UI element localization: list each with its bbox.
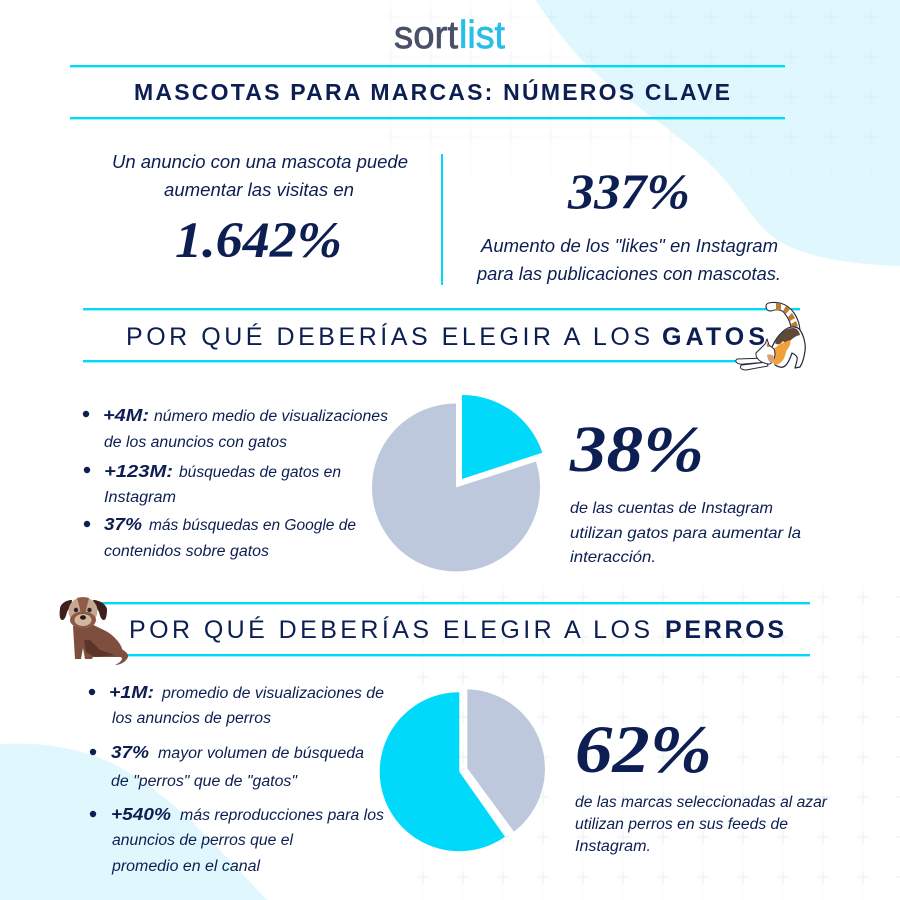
list item: 37% xyxy=(90,742,364,790)
text: aumento de likes xyxy=(476,236,781,284)
list item: +1M: +1M: xyxy=(109,682,154,702)
panel: perros list xyxy=(89,682,384,875)
text: cuentas de Instagram xyxy=(570,500,801,566)
text: marcas seleccionadas: de las marcas seleccionadas al azar xyxy=(575,794,828,811)
list item: +1M xyxy=(89,682,384,727)
panel: perros stat xyxy=(575,711,828,855)
panel: visitas stat xyxy=(112,152,408,269)
list item: +1M: los anuncios de perros xyxy=(112,710,271,727)
logo: sortlist xyxy=(394,14,505,57)
heading: perros: PERROS xyxy=(665,616,784,644)
background pattern: bottom plus grid xyxy=(410,580,900,900)
list item: 37%: 37% xyxy=(104,514,142,534)
background blob: top right xyxy=(535,0,900,266)
logo: sortlist: sort xyxy=(394,14,458,57)
background blob: bottom left xyxy=(0,744,267,900)
heading: gatos: GATOS xyxy=(662,323,765,351)
panel: gatos list xyxy=(83,405,388,560)
text: marcas seleccionadas xyxy=(575,794,828,855)
number: 38%: 38% xyxy=(569,413,704,486)
heading: perros: POR QUÉ DEBERÍAS ELEGIR A LOS xyxy=(129,615,650,644)
list item: +1M: promedio de visualizaciones de xyxy=(161,685,384,702)
list item: +540%: promedio en el canal xyxy=(111,858,261,875)
list item: +4M: +4M: xyxy=(103,405,149,425)
list item: 37% xyxy=(84,514,356,560)
number: 1.642%: 1.642% xyxy=(175,213,342,269)
logo: sortlist: list xyxy=(459,14,505,57)
list item: +123M xyxy=(84,461,341,506)
text: anuncio con mascota: Un anuncio con una mascota puede xyxy=(112,152,408,172)
list item: +540% xyxy=(90,804,384,875)
text: cuentas de Instagram: interacción. xyxy=(570,549,656,566)
list item: +4M: número medio de visualizaciones xyxy=(154,408,388,425)
list item: +540%: +540% xyxy=(111,804,171,824)
list item: +123M: Instagram xyxy=(104,489,176,506)
icon: dog xyxy=(60,597,128,665)
background pattern: top plus grid xyxy=(380,0,900,175)
pie chart: gatos xyxy=(372,395,542,572)
list item: 37%: 37% xyxy=(111,742,149,762)
panel: gatos stat xyxy=(569,413,801,566)
text: aumento de likes: Aumento de los "likes" en Instagram xyxy=(480,236,778,256)
text: aumento de likes: para las publicaciones con mascotas. xyxy=(476,264,781,284)
divider xyxy=(441,154,443,285)
text: anuncio con mascota: aumentar las visitas en xyxy=(164,180,354,200)
heading: gatos: POR QUÉ DEBERÍAS ELEGIR A LOS xyxy=(126,322,650,351)
icon: cat xyxy=(736,302,805,370)
title: números clave: MASCOTAS PARA MARCAS: NÚMEROS CLAVE xyxy=(134,78,730,105)
text: cuentas de Instagram: de las cuentas de Instagram xyxy=(570,500,773,517)
list item: +540%: más reproducciones para los xyxy=(180,807,384,824)
panel: likes stat xyxy=(476,163,781,284)
list item: 37%: de "perros" que de "gatos" xyxy=(111,773,299,790)
heading: gatos xyxy=(83,308,800,362)
text: marcas seleccionadas: Instagram. xyxy=(575,838,651,855)
number: 337%: 337% xyxy=(567,163,690,219)
list item: 37%: mayor volumen de búsqueda xyxy=(158,745,364,762)
list item: +123M: búsquedas de gatos en xyxy=(179,464,341,481)
heading: perros xyxy=(100,602,810,656)
number: 62%: 62% xyxy=(575,711,712,787)
text: anuncio con mascota xyxy=(112,152,408,200)
text: marcas seleccionadas: utilizan perros en sus feeds de xyxy=(575,816,788,833)
list item: +540%: anuncios de perros que el xyxy=(112,832,294,849)
list item: 37%: contenidos sobre gatos xyxy=(104,543,269,560)
pie chart: perros xyxy=(380,689,545,851)
text: cuentas de Instagram: utilizan gatos para aumentar la xyxy=(570,525,801,542)
list item: +123M: +123M: xyxy=(104,461,173,481)
list item: +4M xyxy=(83,405,388,451)
list item: 37%: más búsquedas en Google de xyxy=(149,517,356,534)
list item: +4M: de los anuncios con gatos xyxy=(104,434,287,451)
